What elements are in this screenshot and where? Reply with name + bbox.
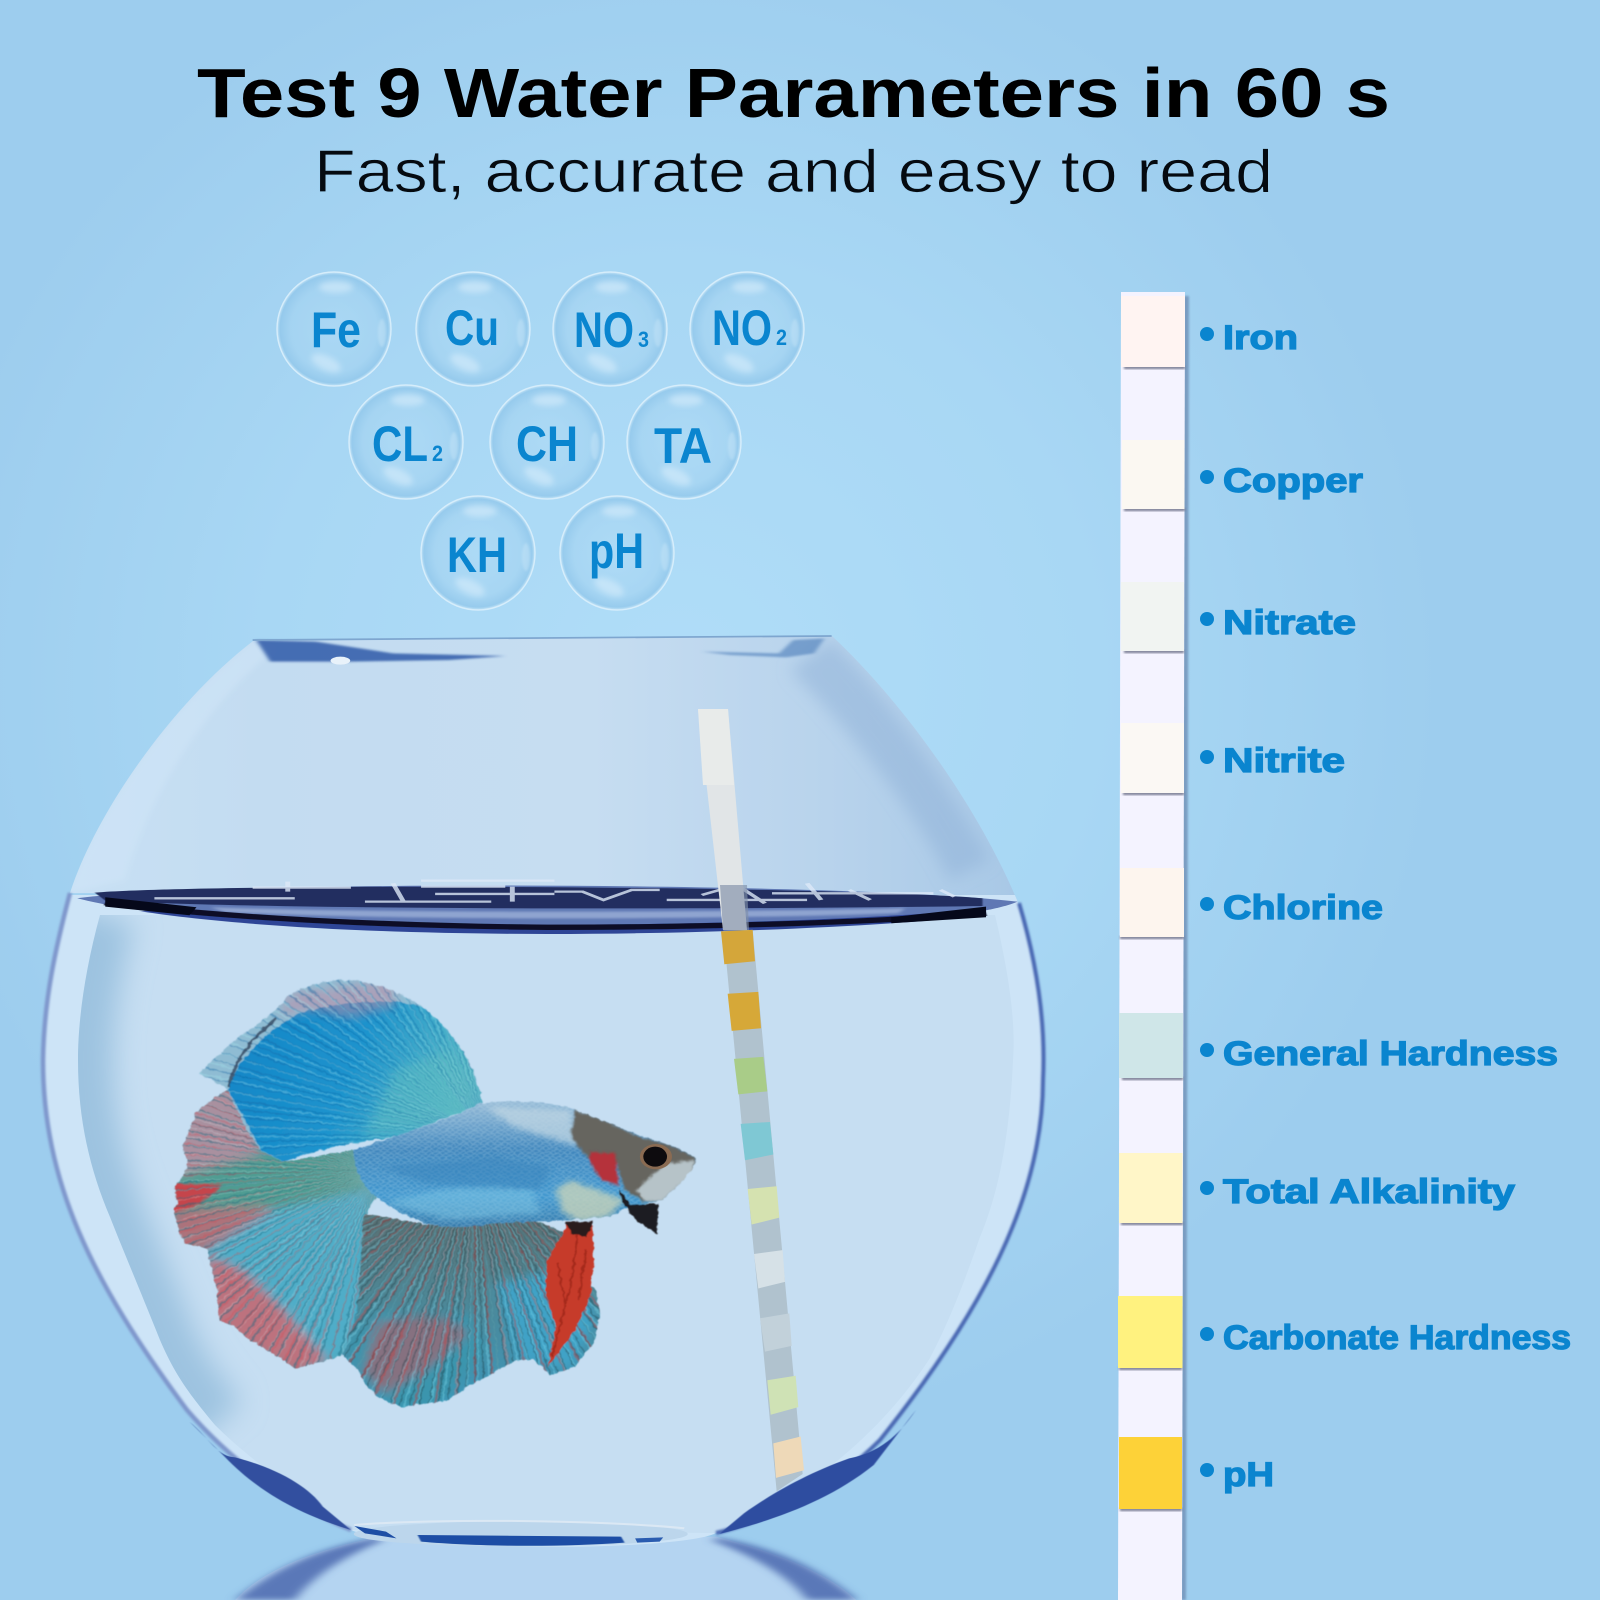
bubble: CH: CH <box>516 416 578 472</box>
pad: nitrite <box>1121 723 1184 795</box>
submerged pad 9 <box>773 1437 804 1478</box>
title: Test 9 Water Parameters in 60 s <box>197 54 1390 132</box>
caudal fin <box>173 1090 378 1370</box>
fish head <box>571 1110 697 1202</box>
pectoral fin <box>545 1222 594 1367</box>
bubble: CL2: CL <box>372 416 428 472</box>
rim shadow left <box>256 640 505 662</box>
base disc <box>354 1521 688 1547</box>
label: Carbonate Hardness: Carbonate Hardness <box>1223 1319 1571 1357</box>
glass right shadow <box>790 640 990 880</box>
anal fin <box>341 1214 601 1408</box>
bottom glass shadows and base <box>189 1410 916 1547</box>
blue under-band <box>140 911 976 934</box>
bubble: NO2: NO <box>712 300 772 356</box>
pad: pH <box>1119 1437 1182 1511</box>
submerged pad 3 <box>734 1057 767 1094</box>
strip shadow <box>1181 296 1189 1600</box>
bubble: TA <box>626 384 742 500</box>
base edge <box>354 1521 684 1528</box>
bubble: NO2 <box>690 272 804 386</box>
bubble: NO3: NO <box>574 302 634 358</box>
pad: iron <box>1121 296 1185 369</box>
bubble: CH <box>490 384 604 500</box>
fishbowl <box>40 636 1050 1560</box>
pad: total alkalinity <box>1119 1153 1183 1225</box>
submerged pad 8 <box>767 1376 798 1415</box>
dark waterline front <box>105 903 986 927</box>
bubble: KH: KH <box>447 527 507 583</box>
label: pH <box>1200 1456 1274 1494</box>
pad: nitrate <box>1121 582 1184 653</box>
submerged pad 2 <box>728 992 761 1031</box>
rim shadows and waterline <box>77 636 1018 934</box>
bubble: CL2: 2 <box>432 441 443 466</box>
label: Total Alkalinity: Total Alkalinity <box>1223 1173 1515 1211</box>
label: Nitrate <box>1200 604 1356 642</box>
label: Iron <box>1200 319 1298 357</box>
bubble: NO2: 2 <box>776 325 787 350</box>
pad: carbonate hardness <box>1118 1296 1182 1370</box>
subtitle: Fast, accurate and easy to read <box>314 138 1273 205</box>
bubble: pH: pH <box>589 523 644 579</box>
submerged pad 4 <box>741 1122 773 1160</box>
label: Nitrite: Nitrite <box>1223 742 1345 780</box>
submerged pad 6 <box>754 1250 785 1288</box>
caudal red streak <box>173 1183 223 1213</box>
water interior <box>78 915 267 1441</box>
reference test strip <box>1118 292 1189 1600</box>
waterline thick ends <box>105 897 986 923</box>
bubble: Cu: Cu <box>445 300 499 356</box>
dorsal fin <box>199 978 484 1162</box>
water body <box>40 895 1050 1560</box>
base left glint <box>354 1526 397 1538</box>
shadow left <box>189 1422 351 1530</box>
water surface band <box>77 886 1018 933</box>
bubble: pH <box>560 496 674 610</box>
anal rays <box>344 1216 600 1406</box>
strip above water <box>698 709 747 930</box>
bubble: CL2 <box>348 384 464 500</box>
label: General Hardness: General Hardness <box>1223 1035 1558 1073</box>
betta fish <box>165 970 705 1417</box>
rim shadow right <box>702 638 825 657</box>
body <box>341 1097 705 1230</box>
fish chin <box>619 1188 659 1234</box>
parameter labels <box>1200 319 1571 1494</box>
lighter mid band <box>211 907 905 918</box>
submerged pad 5 <box>748 1186 779 1225</box>
pad: general hardness <box>1119 1013 1183 1080</box>
bubble: Fe <box>276 272 392 386</box>
dark surface back <box>95 887 983 908</box>
fish throat <box>556 1180 625 1222</box>
glass left highlight band <box>70 641 275 893</box>
label: Nitrate: Nitrate <box>1223 604 1356 642</box>
bubble: Fe: Fe <box>311 302 361 358</box>
label: Iron: Iron <box>1223 319 1298 357</box>
label: pH: pH <box>1223 1456 1274 1494</box>
base dark stripe <box>418 1535 625 1546</box>
fish cheek <box>636 1160 695 1202</box>
submerged pad 1 <box>721 930 755 964</box>
surface ripples <box>154 881 954 903</box>
bubble: NO3: 3 <box>638 327 649 352</box>
label: Chlorine: Chlorine <box>1223 889 1383 927</box>
caudal rays <box>257 1063 502 1277</box>
dorsal rays <box>205 979 483 1160</box>
submerged pad 7 <box>760 1313 792 1352</box>
gill red <box>590 1152 619 1185</box>
bubble: Cu <box>416 272 530 386</box>
rim glint <box>331 657 350 665</box>
label: Copper: Copper <box>1223 462 1363 500</box>
shadow right <box>719 1410 916 1534</box>
bowl outline right <box>716 903 1044 1533</box>
strip body <box>1118 292 1185 1600</box>
bubbles: parameter abbreviations <box>276 272 804 610</box>
bowl reflection on table <box>235 1537 858 1600</box>
bubble: KH <box>420 496 536 610</box>
fish eye <box>640 1144 672 1169</box>
bubble: TA: TA <box>654 418 712 474</box>
glass above the water <box>70 636 1017 900</box>
strip backing under water <box>723 930 803 1491</box>
bowl outline left <box>43 893 351 1530</box>
bubble: NO3 <box>552 272 668 386</box>
test strip dipped in water <box>698 709 804 1491</box>
pad: chlorine <box>1120 868 1184 939</box>
pad: copper <box>1122 440 1185 511</box>
label: Nitrite <box>1200 742 1345 780</box>
base right glint <box>635 1537 663 1543</box>
rim line <box>253 636 832 640</box>
